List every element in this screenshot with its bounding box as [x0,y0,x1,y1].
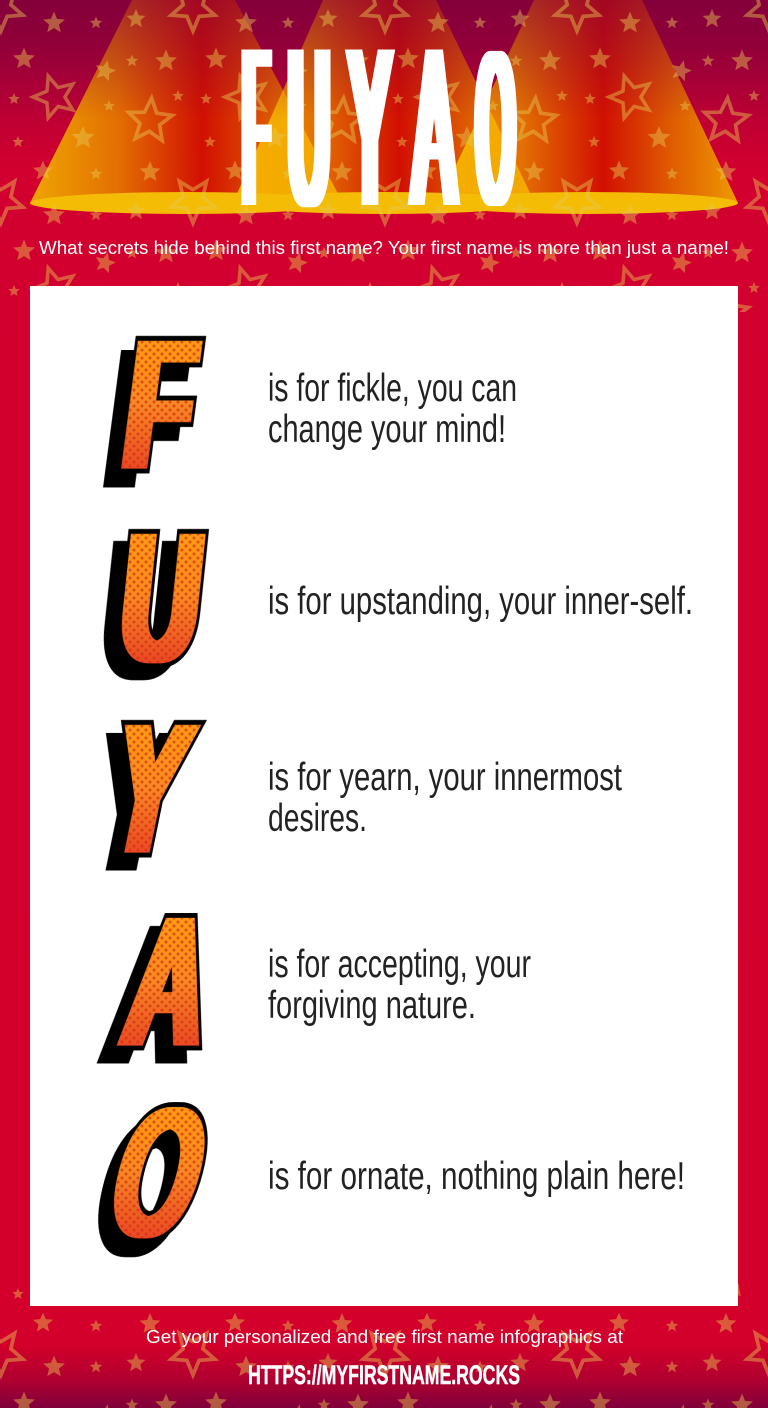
letter U: U [97,507,196,713]
letter A: A [97,892,211,1098]
subtitle: What secrets hide behind this first name? Your first name is more than just a name! [39,238,729,258]
star pattern: header [0,0,768,312]
line Y: is for yearn, your innermost [268,756,622,799]
letter A [96,913,203,1064]
letter U: U [112,495,211,701]
letter O [98,1102,208,1258]
letter F [102,336,206,488]
letter Y [105,720,208,871]
title: U [289,1,329,253]
line F: is for fickle, you can [268,367,517,410]
letter F: F [114,303,206,508]
star pattern: footer [0,1284,768,1408]
title: F [244,2,268,254]
line Y: desires. [268,797,367,840]
title: A [413,2,455,254]
letter Y: Y [94,687,205,892]
letter Y: Y [80,700,190,905]
footer url: HTTPS://MYFIRSTNAME.ROCKS [248,1360,520,1390]
letter F: F [114,303,206,508]
title: Y [349,2,391,254]
title [244,1,514,254]
letter U [103,528,210,680]
letter O: O [79,1084,214,1289]
line A: forgiving nature. [268,984,476,1027]
letter A: A [112,879,226,1085]
letter A: A [112,879,226,1085]
letter O: O [92,1070,226,1275]
line A [268,943,531,1027]
letter U: U [112,495,211,701]
line F: change your mind! [268,408,506,451]
line Y [268,756,622,840]
letter Y: Y [94,687,205,892]
letter F: F [100,317,192,522]
title: O [477,5,514,251]
panel: acrostic [30,286,738,1306]
footer line: Get your personalized and free first name infographics at [146,1327,623,1347]
line A: is for accepting, your [268,943,531,986]
line F [268,367,517,451]
spotlights [0,0,768,214]
letter O: O [92,1070,226,1275]
